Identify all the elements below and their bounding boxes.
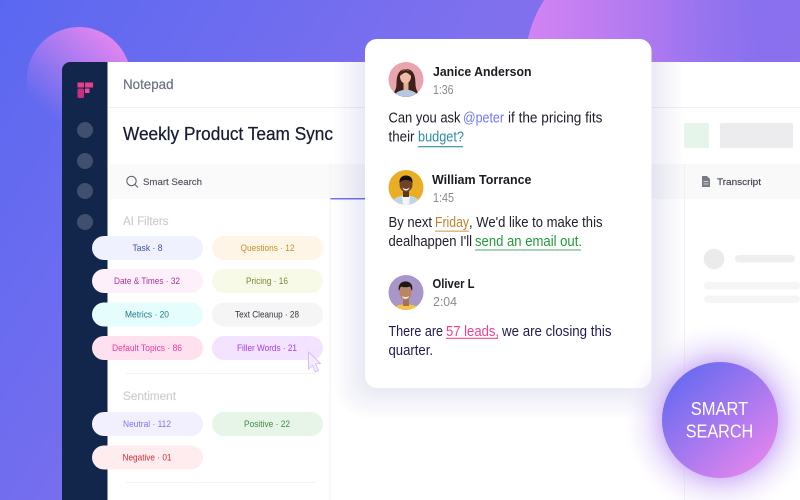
name: William Torrance: William Torrance bbox=[432, 173, 532, 187]
heading: Sentiment: Sentiment bbox=[123, 391, 177, 403]
icon: nav dot 3 bbox=[77, 183, 93, 199]
avatar: William Torrance bbox=[388, 170, 424, 206]
pill: Pricing bbox=[212, 269, 323, 293]
pill: Pricing: Pricing · 16 bbox=[246, 276, 288, 287]
message: William: By next bbox=[388, 215, 432, 231]
panel: navigation sidebar bbox=[62, 62, 108, 500]
message: Janice: their bbox=[388, 130, 415, 146]
pill: Questions: Questions · 12 bbox=[240, 243, 294, 254]
icon: nav dot 2 bbox=[77, 153, 93, 169]
message: Oliver: we are closing this bbox=[501, 324, 612, 340]
pill: Negative: Negative · 01 bbox=[122, 452, 172, 464]
pill: Default Topics bbox=[92, 336, 203, 360]
callout glow bbox=[624, 324, 800, 500]
pill: Task: Task · 8 bbox=[132, 243, 162, 254]
message: Janice bbox=[388, 111, 602, 147]
message: Oliver: There are bbox=[388, 324, 443, 340]
avatar: Oliver L bbox=[388, 275, 424, 311]
pill: Positive bbox=[212, 412, 323, 436]
message: William bbox=[388, 215, 602, 251]
name: Janice Anderson: Janice Anderson bbox=[433, 65, 532, 79]
pill: Text Cleanup bbox=[212, 302, 323, 326]
pill: Neutral: Neutral · 112 bbox=[123, 419, 171, 430]
message: Oliver: 57 leads, bbox=[446, 324, 499, 340]
icon: nav dot 1 bbox=[77, 122, 93, 138]
decorative circle: top left bbox=[27, 27, 131, 131]
pill: Date & Times: Date & Times · 32 bbox=[114, 276, 180, 287]
pill: Filler Words: Filler Words · 21 bbox=[237, 343, 297, 354]
pill: Date & Times bbox=[92, 269, 203, 293]
icon: mouse cursor bbox=[308, 352, 320, 372]
heading: AI Filters: AI Filters bbox=[123, 216, 169, 228]
message: Janice: budget? bbox=[418, 130, 464, 146]
tab label: Transcript: Transcript bbox=[717, 177, 761, 188]
pill: Questions bbox=[212, 236, 323, 260]
message: William: send an email out. bbox=[475, 234, 582, 250]
pill: Task bbox=[92, 236, 203, 260]
message: Janice: Can you ask bbox=[388, 111, 461, 127]
pill: Negative bbox=[92, 446, 203, 470]
pill: Metrics: Metrics · 20 bbox=[125, 310, 169, 320]
tab bar bbox=[330, 164, 685, 500]
icon: magnifier bbox=[127, 176, 138, 188]
card shadow bbox=[347, 62, 670, 406]
pill: Text Cleanup: Text Cleanup · 28 bbox=[235, 310, 299, 320]
pill: Default Topics: Default Topics · 86 bbox=[112, 343, 182, 354]
pill: Metrics bbox=[92, 302, 203, 326]
message: Janice: @peter bbox=[463, 111, 504, 127]
avatar: Janice Anderson bbox=[388, 62, 424, 97]
filter pills: AI Filters bbox=[92, 236, 323, 360]
search bar bbox=[126, 176, 202, 188]
message: William: , We'd like to make this bbox=[469, 215, 602, 231]
pill: Positive: Positive · 22 bbox=[244, 419, 290, 430]
timestamp: 1:45: 1:45 bbox=[433, 190, 454, 205]
callout: Smart Search badge: SEARCH bbox=[686, 422, 753, 442]
decorative circle: top right bbox=[525, 0, 765, 185]
heading: Notepad: Notepad bbox=[123, 76, 174, 92]
message: William: dealhappen I'll bbox=[388, 234, 472, 250]
icon: brand logo bbox=[78, 82, 93, 98]
button placeholder: green bbox=[684, 123, 709, 148]
message: Oliver bbox=[388, 324, 612, 359]
callout: Smart Search badge bbox=[662, 362, 778, 478]
icon: transcript document bbox=[702, 176, 710, 187]
pill: Neutral bbox=[92, 412, 203, 436]
button placeholder: grey bbox=[720, 123, 793, 148]
panel: transcript conversation card bbox=[365, 39, 652, 388]
transcript skeleton bbox=[704, 249, 800, 303]
timestamp: 1:36: 1:36 bbox=[433, 82, 454, 97]
name: Oliver L: Oliver L bbox=[432, 277, 475, 291]
callout: Smart Search badge: SMART bbox=[691, 399, 748, 419]
message: William: Friday bbox=[435, 215, 470, 231]
pill: Filler Words bbox=[212, 336, 323, 360]
title: Weekly Product Team Sync: Weekly Product Team Sync bbox=[123, 124, 333, 144]
timestamp: 2:04: 2:04 bbox=[433, 294, 457, 309]
message: Oliver: quarter. bbox=[388, 343, 433, 359]
search label: Smart Search bbox=[143, 177, 202, 188]
filter pills: Sentiment bbox=[92, 412, 323, 470]
icon: nav dot 4 bbox=[77, 214, 93, 230]
message: Janice: if the pricing fits bbox=[508, 111, 602, 127]
